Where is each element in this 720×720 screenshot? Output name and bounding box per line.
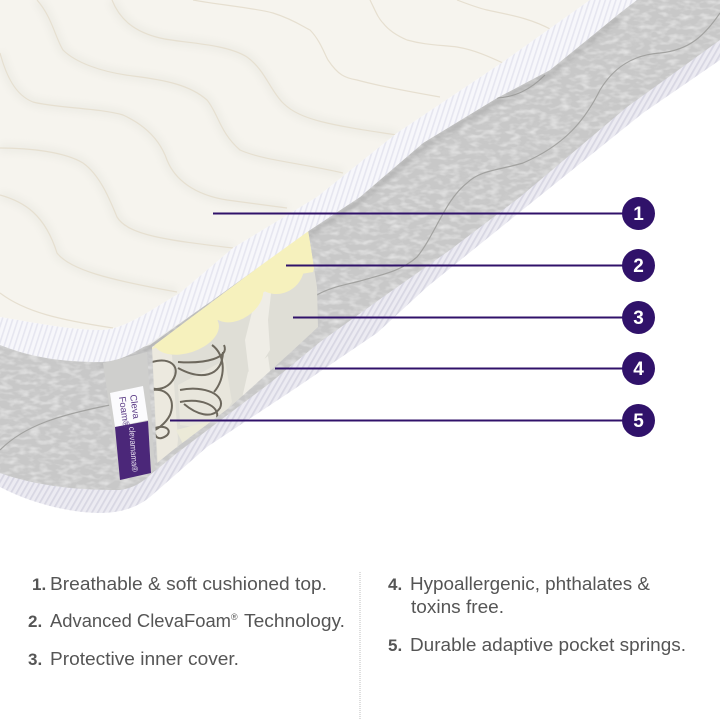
product label: clevamama®: [127, 426, 140, 473]
legend right column: [388, 574, 686, 655]
legend item 2: 2.: [28, 612, 42, 631]
soft shading of quilting: [0, 0, 397, 292]
side quilting lines: [0, 13, 720, 450]
legend item 2: [28, 611, 345, 631]
callout 1: 1: [633, 204, 644, 225]
cut-away pocket: [147, 225, 318, 468]
callout 3: 3: [633, 308, 644, 329]
legend item 3: 3.: [28, 650, 42, 669]
quilting seams: [0, 0, 552, 328]
callout 2: 2: [633, 256, 644, 277]
legend item 1: Breathable & soft cushioned top.: [50, 574, 327, 594]
product label: Foam®: [116, 396, 131, 428]
upper piping band: [0, 0, 637, 362]
grey jersey side panel: [0, 0, 720, 490]
legend item 2: ®: [231, 612, 238, 622]
product label: [103, 352, 155, 480]
legend item 4: 4.: [388, 575, 402, 594]
legend item 4: toxins free.: [411, 597, 504, 617]
legend left column: [28, 574, 345, 669]
legend item 2: Technology.: [244, 611, 345, 631]
legend item 2: Advanced ClevaFoam: [50, 611, 231, 631]
callout 4: 4: [633, 359, 644, 380]
legend item 3: Protective inner cover.: [50, 649, 239, 669]
foam layer: [152, 232, 314, 355]
lower piping band: [0, 38, 720, 513]
column divider: [359, 572, 361, 720]
legend item 5: 5.: [388, 636, 402, 655]
callout 3: [293, 301, 655, 334]
legend item 4: Hypoallergenic, phthalates &: [410, 574, 650, 594]
product label: Cleva: [127, 394, 141, 420]
protective inner cover folds: [152, 285, 272, 468]
legend item 1: 1.: [32, 575, 46, 594]
callout 4: [275, 352, 655, 385]
shadow under top band: [100, 17, 620, 366]
callout 5: [170, 404, 655, 437]
mattress illustration: [0, 0, 720, 513]
cushioned quilted top: [0, 0, 590, 330]
callout 1: [213, 197, 655, 230]
legend item 4: [388, 574, 650, 617]
pocket springs: [152, 345, 225, 438]
legend item 5: Durable adaptive pocket springs.: [410, 635, 686, 655]
callout 2: [286, 249, 655, 282]
callout 5: 5: [633, 411, 644, 432]
